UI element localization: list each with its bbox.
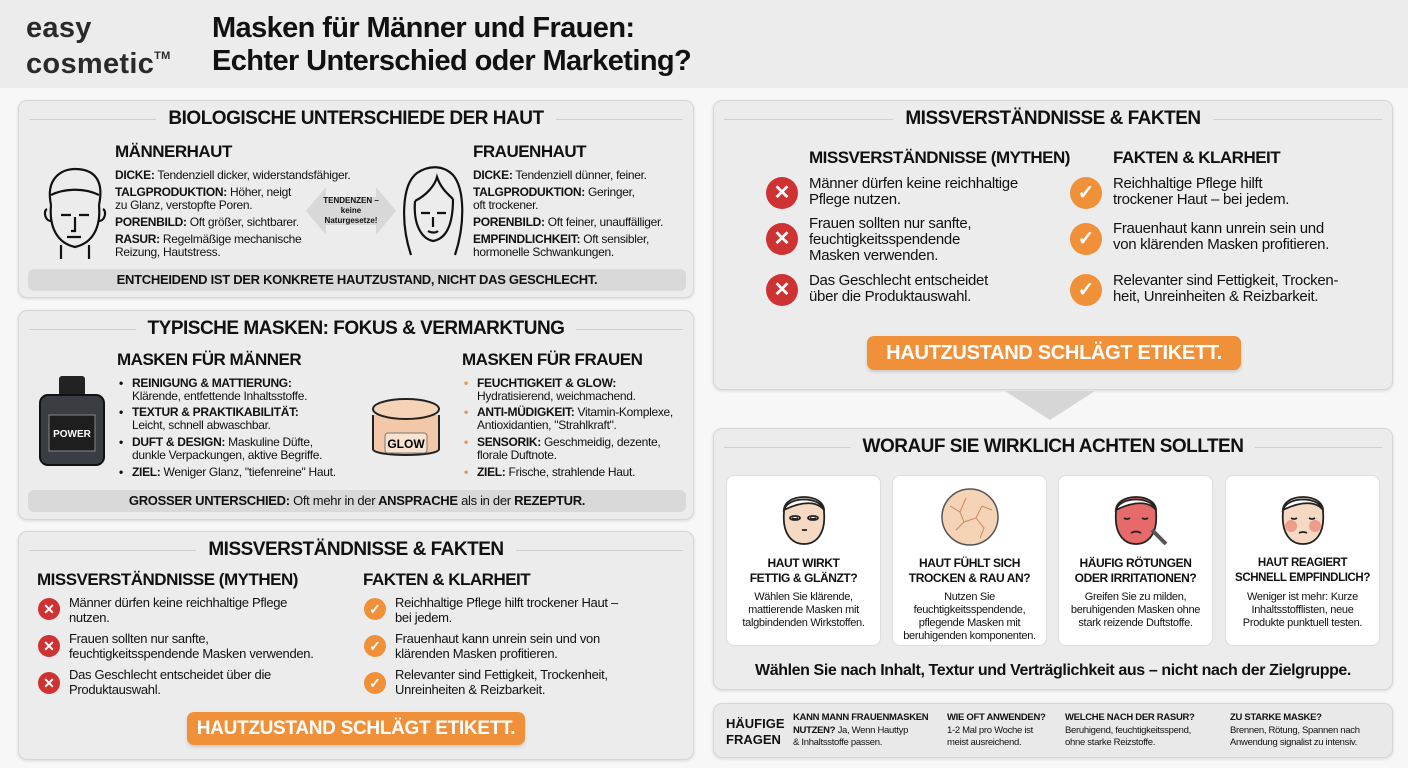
panel: biologische unterschiede: hormonelle Schwankungen. [473,245,614,259]
card: rötungen [1058,475,1213,646]
panel: missverständnisse right: über die Produktauswahl. [809,288,971,305]
button [187,712,525,745]
facts list: ✓ [1078,182,1094,204]
icon: female face [403,166,464,256]
logo: cosmeticTM [26,48,171,80]
myths list [766,177,798,209]
button [867,336,1241,370]
panel: missverständnisse right: Pflege nutzen. [809,191,901,208]
panel: biologische unterschiede: TALGPRODUKTION: Höher, neigt [115,185,291,199]
panel: missverständnisse right: ✓ [1078,279,1094,301]
card: empfindlich [1225,475,1380,646]
panel: missverständnisse left: Männer dürfen keine reichhaltige Pflege [69,595,287,610]
card: rötungen: ODER IRRITATIONEN? [1075,571,1196,585]
icon: glow jar [372,398,440,456]
panel: typische masken: SENSORIK: Geschmeidig, dezente, [477,435,660,449]
icon: glow jar: GLOW [387,437,425,451]
panel: missverständnisse left: Frauenhaut kann unrein sein und von [395,631,600,646]
panel: typische masken: florale Duftnote. [477,448,557,462]
men heading: MÄNNERHAUT [115,142,232,161]
card: rötungen: Greifen Sie zu milden, beruhigenden Masken ohne stark reizende Duftstoffe. [1071,591,1200,629]
panel: missverständnisse left: bei jedem. [395,610,452,625]
men text: DICKE: Tendenziell dicker, widerstandsfähiger. [115,168,350,182]
heading: MISSVERSTÄNDNISSE & FAKTEN [905,108,1201,129]
faq bar [713,703,1393,758]
panel: biologische unterschiede: oft trockener. [473,198,538,212]
panel: biologische unterschiede: RASUR: Regelmäßige mechanische [115,232,301,246]
arrow: double arrow tendenzen: TENDENZEN – [323,196,379,205]
card: fettig: HAUT WIRKT [768,556,840,570]
panel: missverständnisse left: ✓ [369,675,381,691]
title: Echter Unterschied oder Marketing? [212,45,691,77]
logo [26,12,171,80]
myths list: ✕ [43,601,55,617]
panel: typische masken: Leicht, schnell abwaschbar. [132,418,271,432]
faq 1 [793,712,928,748]
icon: power bottle [39,376,105,466]
panel: missverständnisse left: klärenden Masken profitieren. [395,646,558,661]
faq 3: WELCHE NACH DER RASUR? [1065,712,1195,723]
panel: missverständnisse left: Produktauswahl. [69,682,161,697]
panel: missverständnisse left: Reichhaltige Pflege hilft trockener Haut – [395,595,618,610]
myths heading: MISSVERSTÄNDNISSE (MYTHEN) [809,148,1070,167]
arrow: double arrow tendenzen: keine [341,206,361,215]
faq 2: 1-2 Mal pro Woche ist [947,724,1033,736]
arrow: down triangle [1006,391,1094,420]
panel: typische masken: ZIEL: Weniger Glanz, "tiefenreine" Haut. [132,465,336,479]
heading: TYPISCHE MASKEN: FOKUS & VERMARKTUNG [148,318,564,339]
icon: dry skin [941,488,999,546]
faq 4 [1230,712,1360,748]
panel: missverständnisse left [18,531,694,760]
panel: missverständnisse right: ✕ [774,228,790,250]
panel: missverständnisse right [713,100,1393,390]
panel: missverständnisse left: Unreinheiten & Reizbarkeit. [395,682,545,697]
panel: typische masken: TEXTUR & PRAKTIKABILITÄT: [132,405,298,419]
faq 4: Brennen, Rötung, Spannen nach [1230,724,1360,736]
panel: missverständnisse right: feuchtigkeitsspendende [809,231,960,248]
panel: typische masken: ANTI-MÜDIGKEIT: Vitamin-Komplexe, [477,405,673,419]
panel: missverständnisse left: Relevanter sind Fettigkeit, Trockenheit, [395,667,608,682]
card: empfindlich: HAUT REAGIERT [1258,557,1347,569]
panel: missverständnisse left: Frauen sollten nur sanfte, [69,631,209,646]
button: HAUTZUSTAND SCHLÄGT ETIKETT. [197,718,515,739]
card: rötungen: HÄUFIG RÖTUNGEN [1080,556,1192,570]
myths heading: MISSVERSTÄNDNISSE (MYTHEN) [37,570,298,589]
faq 3: ohne starke Reizstoffe. [1065,737,1155,748]
icon: male face [44,168,106,259]
facts heading: FAKTEN & KLARHEIT [363,570,530,589]
faq 3 [1065,712,1195,748]
panel: missverständnisse right: Männer dürfen keine reichhaltige [809,175,1018,192]
panel: biologische unterschiede: TALGPRODUKTION: Geringer, [473,185,635,199]
card: trocken: Nutzen Sie feuchtigkeitsspendende, pflegende Masken mit beruhigenden komponenten. [903,591,1036,642]
button: HAUTZUSTAND SCHLÄGT ETIKETT. [886,342,1222,364]
panel: missverständnisse right: Reichhaltige Pflege hilft [1113,175,1262,192]
card: fettig: Wählen Sie klärende, mattierende Masken mit talgbindenden Wirkstoffen. [742,591,865,629]
women heading: FRAUENHAUT [473,142,586,161]
panel: missverständnisse right: Relevanter sind Fettigkeit, Trocken- [1113,272,1338,289]
panel: missverständnisse right: trockener Haut – bei jedem. [1113,191,1289,208]
women heading: MASKEN FÜR FRAUEN [462,350,642,369]
faq 1: NUTZEN? Ja, Wenn Hauttyp [793,724,908,736]
panel: missverständnisse left: Das Geschlecht entscheidet über die [69,667,271,682]
panel: missverständnisse right: Das Geschlecht entscheidet [809,272,988,289]
heading: WORAUF SIE WIRKLICH ACHTEN SOLLTEN [863,436,1243,457]
women text: DICKE: Tendenziell dünner, feiner. [473,168,647,182]
myths list [38,598,60,620]
facts heading: FAKTEN & KLARHEIT [1113,148,1280,167]
women bullets [464,376,673,479]
panel: typische masken: ZIEL: Frische, strahlende Haut. [477,465,635,479]
panel: missverständnisse left: nutzen. [69,610,110,625]
faq label [726,716,784,747]
panel: missverständnisse left: feuchtigkeitsspendende Masken verwenden. [69,646,314,661]
card: fettig [726,475,881,646]
faq label: FRAGEN [726,732,781,747]
icon: red face [1114,496,1168,546]
panel: typische masken [18,310,694,520]
title: Masken für Männer und Frauen: [212,12,634,44]
header [0,0,1408,88]
panel: missverständnisse left: ✓ [369,638,381,654]
myths list: ✕ [774,182,790,204]
panel: missverständnisse right: heit, Unreinheiten & Reizbarkeit. [1113,288,1318,305]
bottom bar: ENTCHEIDEND IST DER KONKRETE HAUTZUSTAND, NICHT DAS GESCHLECHT. [117,272,597,287]
men bullets: REINIGUNG & MATTIERUNG: [132,376,292,390]
panel: biologische unterschiede: zu Glanz, verstopfte Poren. [115,198,252,212]
arrow: double arrow tendenzen: Naturgesetze! [325,216,377,225]
panel: biologische unterschiede [18,100,694,298]
card: trocken [892,475,1047,646]
logo: easy [26,12,92,44]
panel: typische masken: dunkle Verpackungen, aktive Begriffe. [132,448,322,462]
icon: power bottle: POWER [53,429,92,440]
card: fettig: FETTIG & GLÄNZT? [750,571,857,585]
panel: typische masken: Antioxidantien, "Strahlkraft". [477,418,617,432]
panel: typische masken: FEUCHTIGKEIT & GLOW: [477,376,616,390]
faq 2 [947,712,1046,748]
faq 4: ZU STARKE MASKE? [1230,712,1322,723]
facts list [364,598,386,620]
panel: missverständnisse right: von klärenden Masken profitieren. [1113,236,1329,253]
panel: biologische unterschiede: EMPFINDLICHKEIT: Oft sensibler, [473,232,649,246]
faq 4: Anwendung signalist zu intensiv. [1230,737,1357,748]
panel: missverständnisse left: ✕ [43,638,55,654]
footer statement: Wählen Sie nach Inhalt, Textur und Verträglichkeit aus – nicht nach der Zielgruppe. [755,662,1351,679]
card: trocken: HAUT FÜHLT SICH [919,556,1020,570]
heading: MISSVERSTÄNDNISSE & FAKTEN [208,539,504,560]
faq 2: meist ausreichend. [947,737,1021,748]
panel: biologische unterschiede: PORENBILD: Oft größer, sichtbarer. [115,215,299,229]
title [212,12,691,77]
facts list [1070,177,1102,209]
faq 1: & Inhaltsstoffe passen. [793,737,882,748]
panel: missverständnisse right: Frauenhaut kann unrein sein und [1113,220,1324,237]
faq 3: Beruhigend, feuchtigkeitsspend, [1065,724,1191,736]
panel: biologische unterschiede: PORENBILD: Oft feiner, unauffälliger. [473,215,663,229]
arrow: double arrow tendenzen [306,188,396,234]
bottom bar [28,269,686,291]
icon: oily face [782,496,826,545]
icon: sensitive face [1282,496,1324,545]
panel: missverständnisse right: ✕ [774,279,790,301]
bottom bar: GROSSER UNTERSCHIED: Oft mehr in der ANSPRACHE als in der REZEPTUR. [129,493,585,508]
bottom bar [28,490,686,512]
panel: biologische unterschiede: Reizung, Hautstress. [115,245,220,259]
panel: typische masken: Hydratisierend, weichmachend. [477,389,636,403]
panel: missverständnisse left: ✕ [43,675,55,691]
faq 2: WIE OFT ANWENDEN? [947,712,1046,723]
panel: missverständnisse right: Frauen sollten nur sanfte, [809,215,971,232]
panel: typische masken: DUFT & DESIGN: Maskuline Düfte, [132,435,313,449]
men heading: MASKEN FÜR MÄNNER [117,350,301,369]
men bullets [132,377,307,403]
panel: worauf achten [713,428,1393,690]
card: trocken: TROCKEN & RAU AN? [909,571,1030,585]
panel: missverständnisse right: Masken verwenden. [809,247,938,264]
faq 1: KANN MANN FRAUENMASKEN [793,712,928,723]
card: empfindlich: SCHNELL EMPFINDLICH? [1235,572,1370,584]
card: empfindlich: Weniger ist mehr: Kurze Inhaltsstofflisten, neue Produkte punktuell testen. [1243,591,1362,629]
men bullets: Klärende, entfettende Inhaltsstoffe. [132,389,307,403]
facts list: ✓ [369,601,381,617]
faq label: HÄUFIGE [726,716,784,731]
heading: BIOLOGISCHE UNTERSCHIEDE DER HAUT [168,108,544,129]
panel: missverständnisse right: ✓ [1078,228,1094,250]
